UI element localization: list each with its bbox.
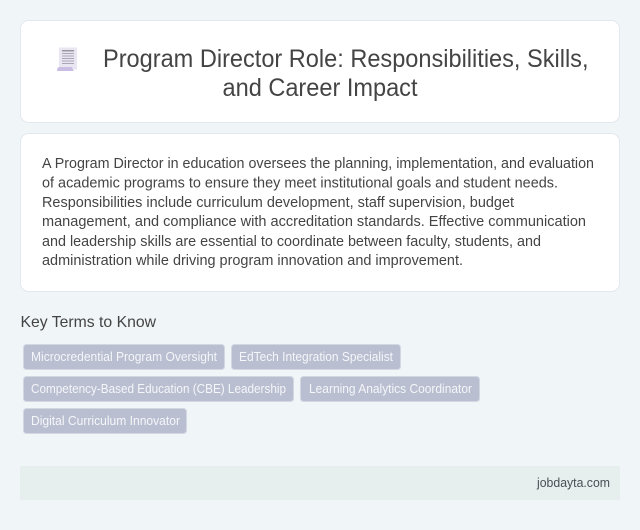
chip: competency-based <box>24 376 294 402</box>
chip: microcredential <box>24 344 224 370</box>
chip: learning analytics: Learning Analytics Coordinator <box>309 381 473 396</box>
chip: learning analytics <box>300 376 480 402</box>
description text: A Program Director in education oversees the planning, implementation, and evaluation <box>42 156 594 172</box>
description text: Responsibilities include curriculum development, staff supervision, budget <box>42 195 514 211</box>
description text: and leadership skills are essential to coordinate between faculty, students, and <box>42 234 541 250</box>
panel: title card <box>20 20 620 122</box>
footer <box>20 466 620 500</box>
chip: microcredential: Microcredential Program Oversight <box>31 349 217 364</box>
title: and Career Impact <box>222 74 418 102</box>
chip: digital curriculum <box>24 408 186 434</box>
icon: document scroll <box>57 48 77 71</box>
heading: key terms: Key Terms to Know <box>20 314 156 331</box>
description text: management, and compliance with accreditation standards. Effective communication <box>42 214 586 230</box>
description text <box>42 156 594 269</box>
title <box>103 45 588 102</box>
chip: edtech: EdTech Integration Specialist <box>239 349 393 364</box>
panel: description card <box>20 134 620 292</box>
key term chips <box>24 344 480 434</box>
title: Program Director Role: Responsibilities, Skills, <box>103 45 588 73</box>
description text: of academic programs to ensure they meet institutional goals and student needs. <box>42 176 558 192</box>
chip: competency-based: Competency-Based Education (CBE) Leadership <box>31 381 286 396</box>
footer source: jobdayta.com <box>536 476 610 490</box>
description text: administration while driving program innovation and improvement. <box>42 253 463 269</box>
chip: digital curriculum: Digital Curriculum Innovator <box>31 413 181 428</box>
chip: edtech <box>232 344 400 370</box>
